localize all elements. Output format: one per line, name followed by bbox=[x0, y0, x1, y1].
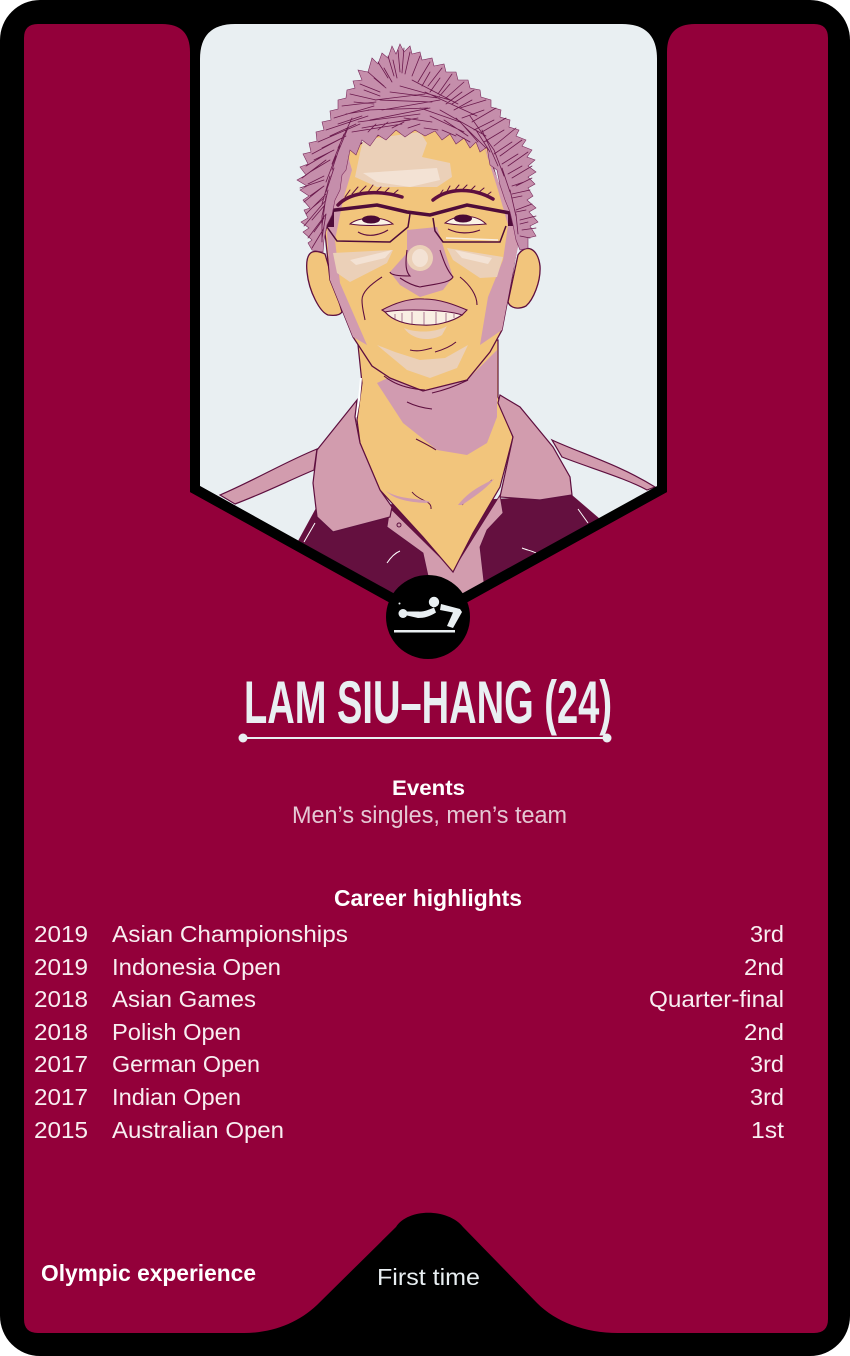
button bbox=[397, 523, 401, 527]
career highlights table: 2nd bbox=[744, 954, 784, 980]
shoulder straps bbox=[220, 440, 655, 504]
neck highlight sliver bbox=[356, 378, 361, 417]
shirt placket bbox=[387, 495, 503, 600]
eyes bbox=[350, 214, 486, 235]
career highlights table: Indian Open bbox=[112, 1084, 241, 1110]
career highlights table: 2nd bbox=[744, 1019, 784, 1045]
career highlights table: 2017 bbox=[34, 1084, 88, 1110]
portrait illustration bbox=[200, 24, 657, 624]
career highlights table: 3rd bbox=[750, 1084, 784, 1110]
cheek highlights bbox=[333, 245, 503, 282]
neck marks bbox=[407, 402, 492, 509]
dark shirt bbox=[298, 496, 599, 594]
collar bbox=[313, 395, 572, 532]
events bbox=[292, 777, 567, 829]
career highlights table: Asian Games bbox=[112, 986, 256, 1012]
career highlights table: 3rd bbox=[750, 921, 784, 947]
sport badge bbox=[386, 575, 470, 659]
career highlights table: 1st bbox=[751, 1117, 784, 1143]
neck shadow bbox=[377, 350, 497, 455]
career highlights table: Quarter-final bbox=[649, 986, 784, 1012]
right ear bbox=[508, 248, 540, 308]
events: Men’s singles, men’s team bbox=[292, 802, 567, 829]
chevron border bbox=[195, 40, 662, 618]
career highlights table: Polish Open bbox=[112, 1019, 241, 1045]
mouth bbox=[382, 299, 467, 325]
career highlights table: 2017 bbox=[34, 1051, 88, 1077]
events: Events bbox=[392, 777, 465, 800]
hair strands bbox=[300, 48, 536, 248]
name underline bbox=[238, 734, 612, 742]
face shadows bbox=[327, 143, 518, 345]
forehead highlight bbox=[355, 132, 452, 187]
olympic experience value: First time bbox=[377, 1264, 480, 1290]
face lines bbox=[362, 250, 477, 393]
career highlights table bbox=[34, 921, 784, 1143]
career highlights table: 2018 bbox=[34, 1019, 88, 1045]
career highlights table: Asian Championships bbox=[112, 921, 348, 947]
career highlights table: 2019 bbox=[34, 921, 88, 947]
glasses bbox=[326, 205, 517, 242]
face bbox=[325, 130, 518, 391]
career highlights table: 2018 bbox=[34, 986, 88, 1012]
chin highlight bbox=[377, 345, 468, 378]
hair bbox=[297, 44, 538, 252]
career highlights table: 2015 bbox=[34, 1117, 88, 1143]
neck creases bbox=[386, 479, 494, 505]
career highlights table: 3rd bbox=[750, 1051, 784, 1077]
eyebrows bbox=[338, 185, 493, 205]
career highlights heading: Career highlights bbox=[334, 885, 522, 911]
neck bbox=[357, 340, 513, 572]
icon: table tennis player bbox=[394, 597, 462, 632]
olympic experience label: Olympic experience bbox=[41, 1260, 256, 1286]
career highlights table: Indonesia Open bbox=[112, 954, 281, 980]
left ear bbox=[307, 251, 342, 315]
career highlights table: Australian Open bbox=[112, 1117, 284, 1143]
shirt creases bbox=[304, 509, 588, 563]
career highlights table: 2019 bbox=[34, 954, 88, 980]
athlete name: LAM SIU–HANG (24) bbox=[244, 669, 612, 736]
career highlights table: German Open bbox=[112, 1051, 260, 1077]
